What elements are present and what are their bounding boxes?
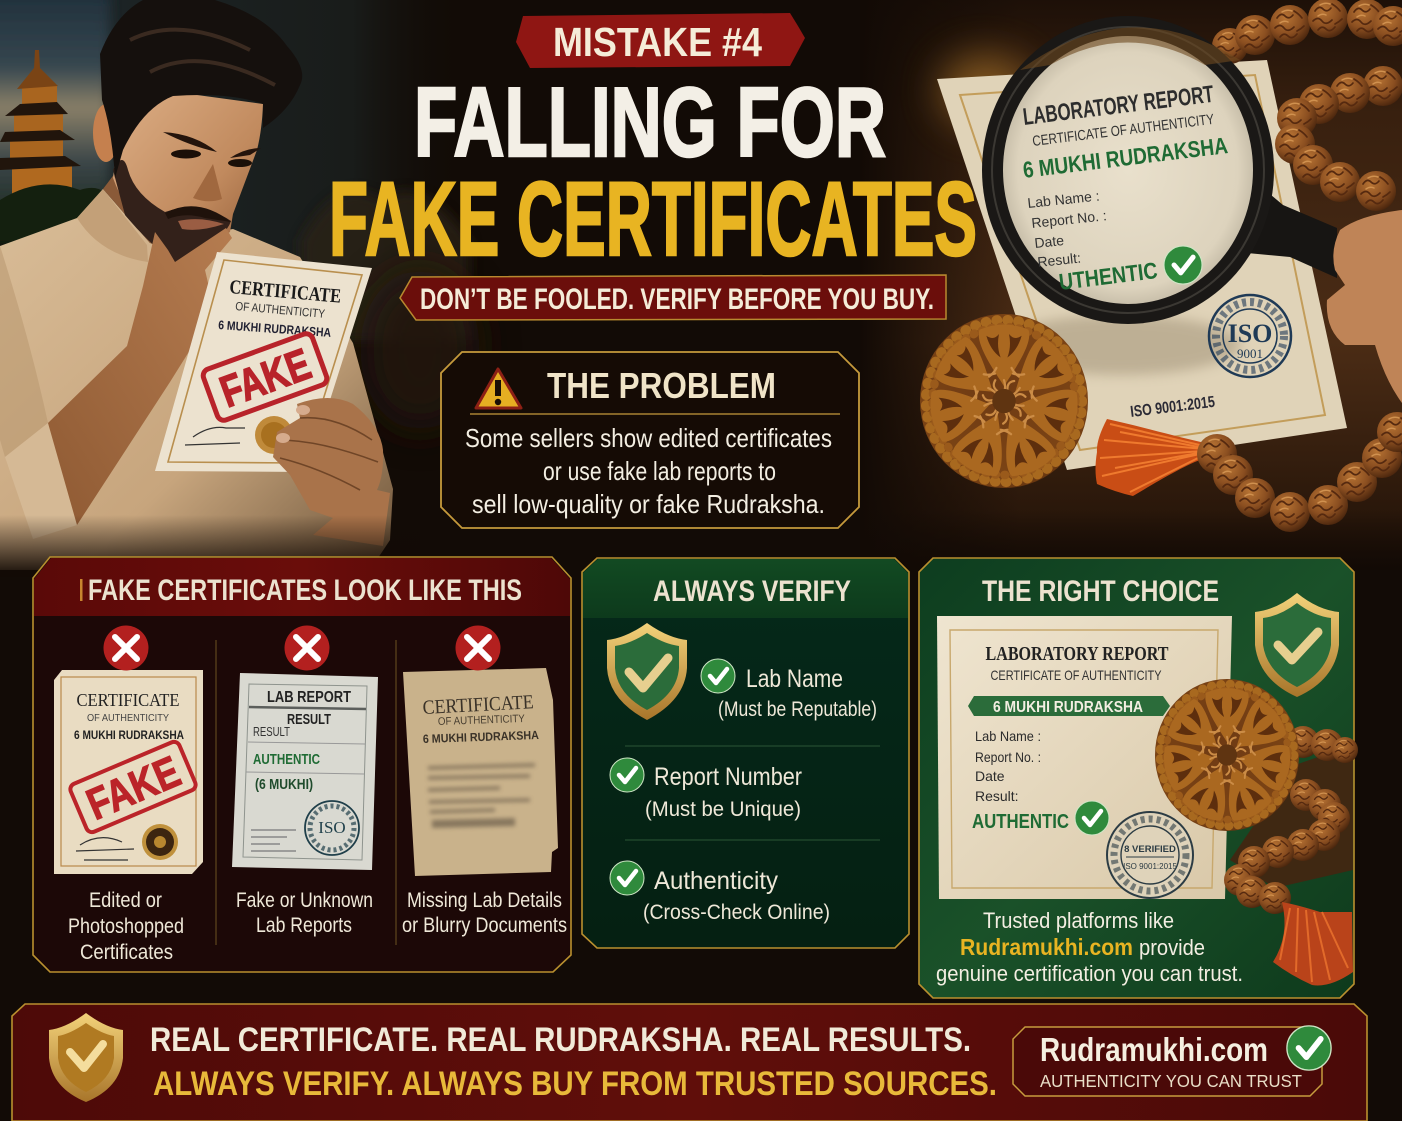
body text: or use fake lab reports to bbox=[543, 456, 776, 486]
item: authenticity: (Cross-Check Online) bbox=[643, 901, 830, 924]
title: FALLING FOR bbox=[414, 67, 886, 177]
certificate 2: lab report: ISO bbox=[318, 818, 346, 837]
scene: pagoda and dusk sky bbox=[0, 0, 112, 245]
brand badge: AUTHENTICITY YOU CAN TRUST bbox=[1040, 1071, 1302, 1091]
heading: ALWAYS VERIFY bbox=[653, 575, 851, 608]
slogan: ALWAYS VERIFY. ALWAYS BUY FROM TRUSTED SOURCES. bbox=[153, 1065, 997, 1103]
laboratory report: AUTHENTIC bbox=[972, 811, 1069, 833]
panel: fake certificates bbox=[33, 557, 571, 972]
item: lab name: (Must be Reputable) bbox=[718, 698, 877, 721]
certificate 2: lab report: (6 MUKHI) bbox=[255, 777, 313, 793]
held certificate marked fake: FAKE bbox=[214, 340, 317, 417]
laboratory report: Report No. : bbox=[975, 749, 1041, 765]
scene: certificate on wood bbox=[937, 60, 1347, 470]
captions: or Blurry Documents bbox=[402, 914, 567, 937]
certificate 2: lab report: RESULT bbox=[287, 712, 331, 728]
tassel and beads, lower right bbox=[1096, 412, 1402, 532]
footer banner bbox=[12, 1004, 1367, 1121]
slogan: REAL CERTIFICATE. REAL RUDRAKSHA. REAL RESULTS. bbox=[150, 1021, 971, 1059]
captions: Fake or Unknown bbox=[236, 889, 373, 912]
item: authenticity bbox=[610, 861, 830, 924]
item: lab name bbox=[701, 659, 877, 721]
magnifying glass: CERTIFICATE OF AUTHENTICITY bbox=[1032, 112, 1215, 150]
wood and beads bbox=[1224, 726, 1358, 985]
held certificate marked fake: CERTIFICATE bbox=[229, 276, 342, 308]
item: report number: Report Number bbox=[654, 763, 802, 791]
body text: Some sellers show edited certificates bbox=[465, 423, 832, 453]
panel: the right choice bbox=[919, 558, 1358, 998]
badge: mistake 4 bbox=[516, 13, 805, 68]
hand holding magnifier bbox=[1327, 210, 1402, 403]
captions: Photoshopped bbox=[68, 915, 184, 938]
prayer beads, top right bbox=[1212, 0, 1402, 211]
heading: THE RIGHT CHOICE bbox=[982, 575, 1219, 608]
certified seal: 8 VERIFIED bbox=[1124, 844, 1176, 855]
magnifying glass: Report No. : bbox=[1031, 207, 1107, 231]
captions: Lab Reports bbox=[256, 914, 352, 937]
subtitle banner: DON’T BE FOOLED. VERIFY BEFORE YOU BUY. bbox=[420, 283, 934, 316]
certificate 3: blurry bbox=[403, 668, 558, 876]
large rudraksha bead bbox=[920, 314, 1088, 488]
rudraksha bead bbox=[1155, 679, 1299, 831]
held certificate marked fake: OF AUTHENTICITY bbox=[235, 299, 326, 321]
eyes and brows bbox=[163, 132, 261, 158]
item: report number bbox=[610, 758, 802, 821]
magnifying glass: Lab Name : bbox=[1027, 188, 1100, 211]
closing text: genuine certification you can trust. bbox=[936, 961, 1243, 986]
captions: Edited or bbox=[89, 889, 162, 912]
certificate 1: edited: 6 MUKHI RUDRAKSHA bbox=[74, 728, 184, 742]
icon: shield bbox=[607, 623, 687, 720]
certificate 1: edited: FAKE bbox=[80, 747, 187, 830]
sleeve cuff bbox=[5, 423, 77, 539]
body text bbox=[465, 423, 832, 519]
magnifying glass: UTHENTIC bbox=[1057, 257, 1159, 295]
neck bbox=[103, 160, 165, 250]
certificate 3: blurry: CERTIFICATE bbox=[422, 691, 534, 719]
reject marks bbox=[104, 626, 500, 670]
certificate 2: lab report: LAB REPORT bbox=[267, 689, 351, 706]
ISO seal: ISO bbox=[1228, 319, 1272, 348]
laboratory report: Lab Name : bbox=[975, 728, 1041, 744]
heading: THE PROBLEM bbox=[547, 365, 776, 406]
held certificate marked fake bbox=[155, 252, 372, 472]
captions: Missing Lab Details bbox=[407, 889, 562, 912]
heading: FAKE CERTIFICATES LOOK LIKE THIS bbox=[88, 574, 522, 607]
icon: shield bbox=[1255, 593, 1339, 697]
certified seal bbox=[1107, 812, 1193, 898]
title bbox=[329, 67, 977, 278]
certificate 1: edited: OF AUTHENTICITY bbox=[87, 712, 169, 724]
hair bbox=[100, 0, 302, 178]
certificate 1: edited bbox=[54, 670, 203, 874]
magnifying glass: Result: bbox=[1037, 250, 1082, 270]
closing text: provide bbox=[1139, 935, 1205, 960]
closing text: Rudramukhi.com bbox=[960, 934, 1133, 960]
beard bbox=[113, 160, 231, 264]
panel: the problem bbox=[441, 352, 859, 528]
magnifying glass: 6 MUKHI RUDRAKSHA bbox=[1021, 132, 1229, 183]
laboratory report: CERTIFICATE OF AUTHENTICITY bbox=[990, 667, 1162, 683]
brand badge bbox=[1013, 1026, 1331, 1096]
laboratory report: 6 MUKHI RUDRAKSHA bbox=[993, 699, 1143, 716]
captions bbox=[68, 889, 567, 964]
panel header bbox=[34, 558, 570, 616]
closing text: Trusted platforms like bbox=[983, 908, 1174, 933]
certificate 3: blurry: 6 MUKHI RUDRAKSHA bbox=[423, 728, 539, 746]
fade at bottom of figure bbox=[0, 515, 420, 577]
certificate 3: blurry: OF AUTHENTICITY bbox=[438, 713, 526, 728]
magnifying glass bbox=[982, 16, 1337, 324]
illustration: worried man bbox=[0, 0, 393, 570]
closing text bbox=[936, 908, 1243, 986]
holding hand bbox=[273, 398, 390, 546]
panel: always verify bbox=[582, 558, 909, 948]
item: report number: (Must be Unique) bbox=[645, 798, 801, 821]
icon: gold shield bbox=[49, 1013, 123, 1102]
laboratory report bbox=[937, 616, 1232, 899]
face bbox=[113, 92, 263, 264]
ISO seal: 9001 bbox=[1237, 346, 1263, 361]
subtitle banner bbox=[400, 275, 946, 320]
kurta body bbox=[0, 189, 393, 570]
ISO stamp: ISO 9001:2015 bbox=[1129, 394, 1216, 421]
slogan bbox=[150, 1021, 997, 1103]
certified seal: ISO 9001:2015 bbox=[1123, 862, 1177, 871]
badge: mistake 4: MISTAKE #4 bbox=[553, 19, 762, 65]
brand badge: Rudramukhi.com bbox=[1040, 1031, 1268, 1068]
certificate 1: edited: CERTIFICATE bbox=[76, 690, 180, 710]
item: authenticity: Authenticity bbox=[654, 867, 778, 895]
held certificate marked fake: 6 MUKHI RUDRAKSHA bbox=[218, 318, 331, 340]
captions: Certificates bbox=[80, 941, 173, 964]
ISO seal bbox=[1209, 295, 1291, 377]
icon: warning triangle bbox=[476, 369, 521, 408]
ear bbox=[93, 104, 119, 162]
item: lab name: Lab Name bbox=[746, 665, 843, 693]
certificate 2: lab report bbox=[232, 673, 378, 870]
arm and hand at chin bbox=[48, 228, 232, 525]
collar bbox=[77, 189, 148, 262]
certificate 2: lab report: AUTHENTIC bbox=[253, 752, 320, 768]
laboratory report: Result: bbox=[975, 788, 1019, 804]
magnifying glass: Date bbox=[1034, 232, 1065, 251]
panel header bbox=[583, 559, 908, 618]
nose and lips bbox=[193, 164, 222, 201]
certificate 2: lab report: RESULT bbox=[253, 725, 290, 739]
magnifying glass: LABORATORY REPORT bbox=[1021, 81, 1216, 131]
laboratory report: LABORATORY REPORT bbox=[986, 643, 1169, 665]
body text: sell low-quality or fake Rudraksha. bbox=[472, 489, 825, 519]
laboratory report: Date bbox=[975, 768, 1005, 784]
title: FAKE CERTIFICATES bbox=[329, 161, 977, 278]
